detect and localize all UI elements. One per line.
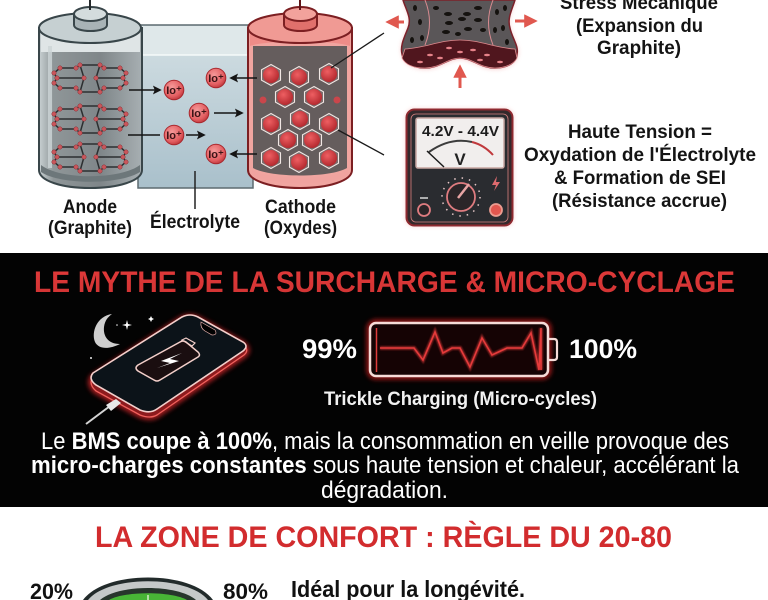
icon: voltmeter: V <box>454 150 466 169</box>
icon: crescent moon and stars <box>90 314 154 359</box>
panel: battery cell diagram <box>39 0 384 239</box>
heading: comfort zone: LA ZONE DE CONFORT : RÈGLE DU 20-80 <box>95 520 672 554</box>
lithium ions <box>164 68 226 164</box>
label: anode: Anode <box>63 197 117 218</box>
label: cathode: Cathode <box>265 197 336 218</box>
electrolyte pointer <box>194 171 196 209</box>
text: 99%: 99% <box>302 334 357 364</box>
panel: overcharge myth <box>0 253 768 507</box>
icon: voltmeter: 4.2V - 4.4V <box>422 123 499 140</box>
electrolyte tank <box>50 25 345 188</box>
text: mechanical stress: Graphite) <box>597 38 681 59</box>
arrows: expansion directions <box>388 21 535 88</box>
icon: battery micro-cycles <box>369 322 557 377</box>
label: graphite: (Graphite) <box>48 218 132 239</box>
text: BMS explanation: micro-charges constantes sous haute tension et chaleur, accélérant la <box>31 452 740 479</box>
text: high voltage: Oxydation de l'Électrolyte <box>524 144 756 166</box>
text: high voltage: (Résistance accrue) <box>552 191 727 212</box>
icon: charging cable <box>86 401 117 424</box>
oxide particles <box>260 64 340 172</box>
text: high voltage: & Formation de SEI <box>554 168 726 189</box>
cathode cylinder <box>248 0 352 188</box>
text: high voltage: Haute Tension = <box>568 122 712 143</box>
label: oxides: (Oxydes) <box>264 218 337 239</box>
callout lines <box>331 33 384 155</box>
icon: phone charging <box>86 315 247 424</box>
icon: mechanical stress graphite block <box>401 0 518 69</box>
heading: overcharge myth: LE MYTHE DE LA SURCHARGE & MICRO-CYCLAGE <box>34 266 735 299</box>
text: 100%: 100% <box>569 334 637 364</box>
text: BMS explanation <box>31 428 740 504</box>
graphite layers <box>52 63 128 173</box>
text: trickle charging: Trickle Charging (Micro-cycles) <box>324 389 597 410</box>
text: high voltage <box>524 122 756 212</box>
icon: battery with bolt <box>136 338 200 381</box>
text: mechanical stress: (Expansion du <box>576 16 703 37</box>
text: mechanical stress <box>560 0 718 59</box>
label: electrolyte: Électrolyte <box>150 211 240 233</box>
ion flow arrows <box>128 78 257 154</box>
text: BMS explanation: dégradation. <box>321 477 448 504</box>
icon: voltmeter <box>406 109 513 226</box>
gauge: comfort zone <box>83 578 213 600</box>
anode cylinder <box>39 0 142 188</box>
text: BMS explanation: Le BMS coupe à 100%, mais la consommation en veille provoque des <box>41 428 729 455</box>
